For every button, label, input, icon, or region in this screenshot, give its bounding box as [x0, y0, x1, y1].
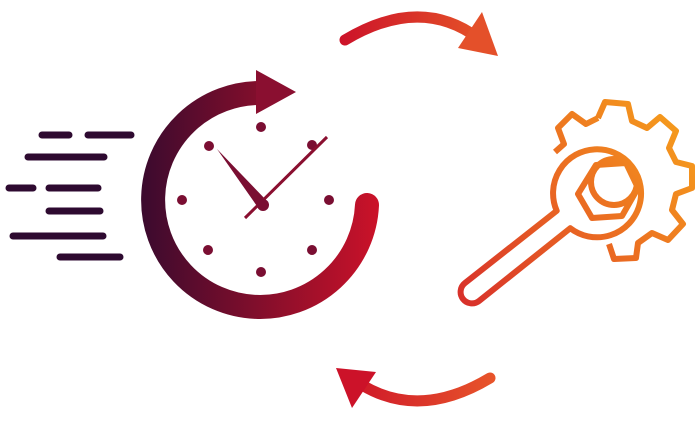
- arrowhead: [256, 70, 296, 114]
- nut: [578, 163, 638, 218]
- speed lines: [9, 135, 131, 257]
- wrench: [461, 149, 641, 303]
- clock: [153, 70, 367, 307]
- circular arrow ring: [153, 93, 367, 307]
- gear and wrench: [461, 102, 692, 303]
- hands: [217, 149, 267, 209]
- gear: [598, 102, 692, 259]
- arrow: bottom: [336, 368, 490, 408]
- hour dots: [177, 122, 334, 277]
- arrow: top: [345, 12, 498, 56]
